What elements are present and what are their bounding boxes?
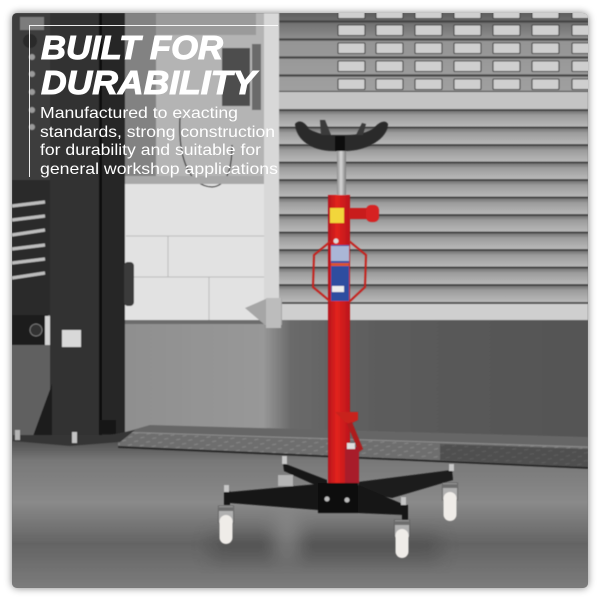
roller shutter: [279, 8, 599, 334]
transmission jack: [218, 120, 458, 558]
title: BUILT FOR: [41, 29, 223, 66]
description: general workshop applications: [40, 161, 278, 178]
electrical box on wall: [124, 44, 264, 187]
title: [41, 35, 260, 95]
chrome ram: [337, 150, 346, 195]
vehicle lift post: [13, 13, 135, 446]
jack base front: [224, 483, 408, 520]
description: [40, 105, 278, 178]
pump assembly: [335, 412, 363, 483]
castors rear: [278, 475, 458, 521]
tool cabinet: [12, 13, 52, 440]
description: Manufactured to exacting: [40, 105, 238, 122]
description: for durability and suitable for: [40, 142, 262, 159]
chequer plate ramp: [118, 425, 588, 469]
hexagonal handle: [313, 241, 366, 302]
lower floor: [12, 440, 588, 588]
text frame lines: [30, 26, 278, 177]
wall pillar: [264, 184, 268, 298]
saddle: [295, 120, 388, 151]
jack pole: [328, 195, 350, 483]
tyres and bracket: [124, 262, 282, 328]
floor reflections: [210, 515, 440, 560]
castors front: [218, 506, 410, 558]
title: DURABILITY: [41, 64, 259, 101]
wall blocks: [124, 13, 265, 321]
jack base back arms: [282, 456, 454, 498]
floor behind: [124, 320, 588, 445]
valve knob: [349, 205, 379, 222]
product label: [331, 238, 349, 301]
shutter windows: [338, 8, 599, 90]
description: standards, strong construction: [40, 124, 275, 141]
yellow label: [330, 208, 344, 223]
